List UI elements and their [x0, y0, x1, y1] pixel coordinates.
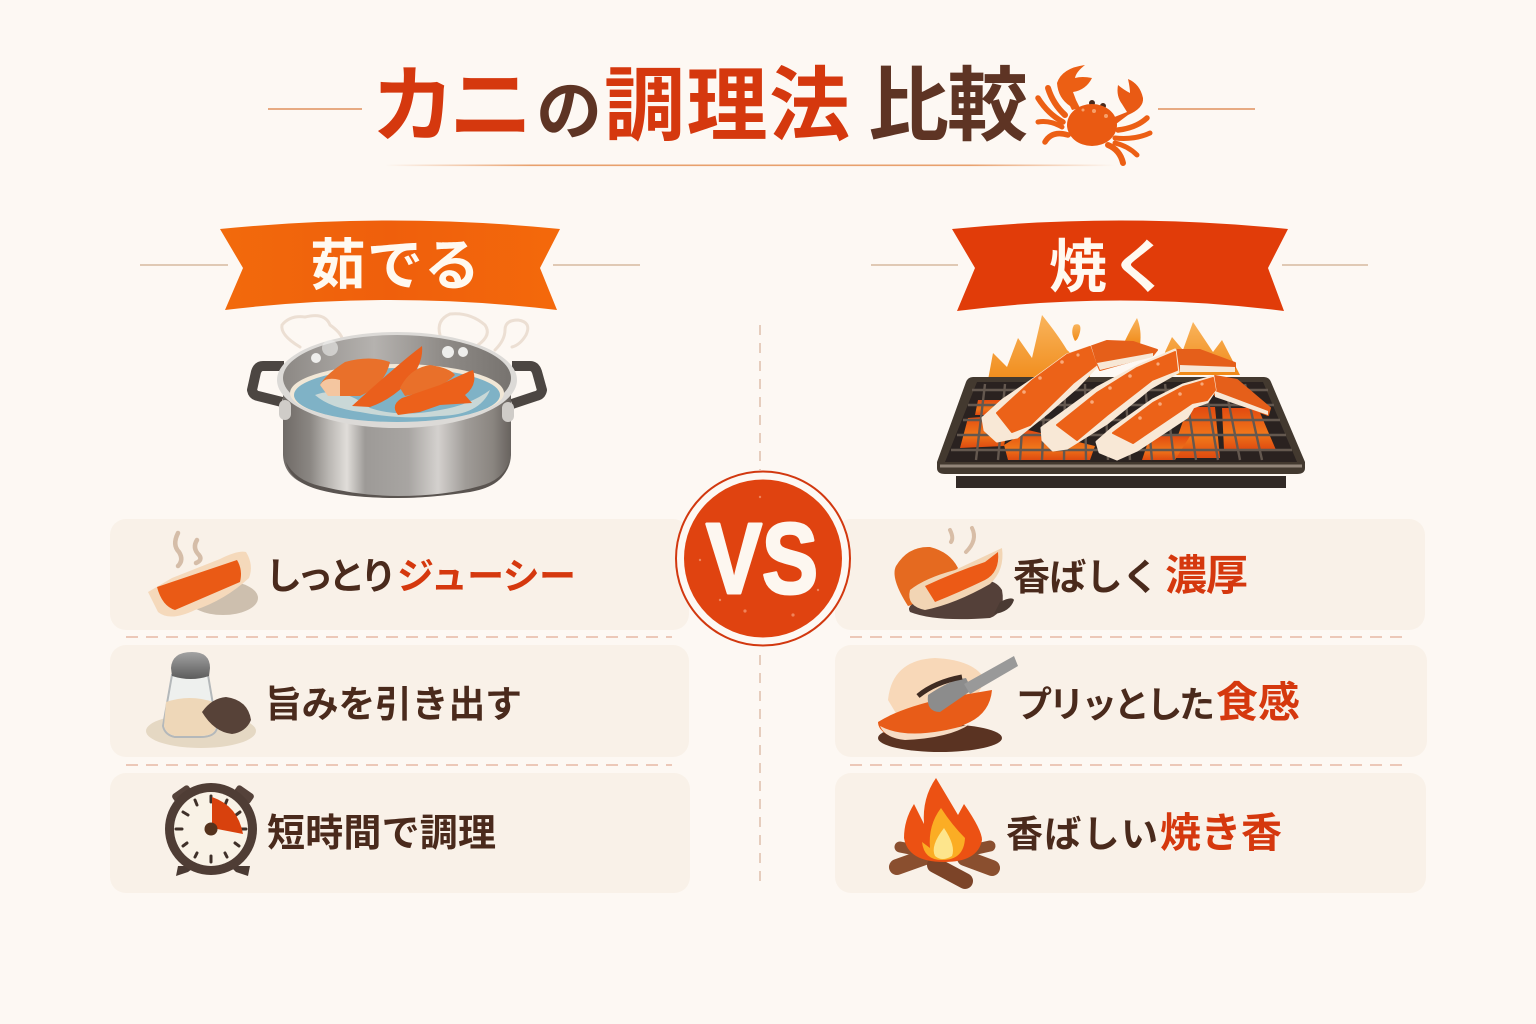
- text: 香ばしい焼き香: 香ばしい: [1006, 814, 1158, 855]
- pot body: [283, 392, 511, 498]
- title: [371, 59, 1028, 153]
- text: 香ばしく濃厚: 香ばしく: [1013, 557, 1159, 598]
- text: プリッとした食感: [1016, 679, 1300, 726]
- divider: [126, 636, 672, 638]
- text: 旨みを引き出す: 旨みを引き出す: [265, 684, 522, 725]
- embers: [960, 400, 1276, 460]
- banner: 茹でる: 茹でる: [310, 234, 480, 297]
- handles: [252, 366, 542, 404]
- icon: steaming crab meat: [148, 533, 258, 617]
- crab legs in water: [320, 358, 390, 396]
- crab leg 2: [1042, 350, 1235, 450]
- banner left rule right: [553, 264, 640, 266]
- banner right rule left: [871, 264, 958, 266]
- panel: right row 2: [835, 645, 1427, 757]
- banner: 茹でる: [220, 220, 560, 310]
- text: 香ばしい焼き香: 焼き香: [1160, 810, 1282, 856]
- illustration: boiling pot: [252, 314, 542, 498]
- panel: right row 3: [835, 773, 1426, 893]
- panel: left row 1: [110, 519, 689, 630]
- VS badge: [676, 472, 850, 646]
- grill frame: [937, 377, 1305, 474]
- illustration: grilled crab legs: [937, 315, 1305, 488]
- title: の: [536, 74, 602, 148]
- icon: crab: [1038, 65, 1150, 163]
- center dashed line bottom: [759, 655, 761, 882]
- panel: left row 3: [110, 773, 690, 893]
- title underline: [385, 164, 1115, 166]
- crab leg 3: [1097, 376, 1270, 459]
- icon: campfire: [897, 778, 992, 881]
- crab leg 1: [983, 341, 1157, 441]
- steam: [282, 314, 528, 350]
- center dashed line top: [759, 325, 761, 470]
- water: [290, 364, 504, 422]
- VS badge: VS: [706, 503, 818, 615]
- icon: salt shaker: [146, 652, 256, 748]
- icon: tongs and crab: [878, 656, 1018, 752]
- divider: [850, 764, 1410, 766]
- text: 香ばしい焼き香: [1006, 810, 1282, 856]
- text: 香ばしく濃厚: [1013, 552, 1248, 599]
- banner right rule right: [1282, 264, 1368, 266]
- title: 調理法: [604, 62, 850, 152]
- bubbles: [311, 340, 468, 363]
- title left rule: [268, 108, 362, 110]
- icon: timer clock: [165, 783, 257, 876]
- panel: left row 2: [110, 645, 689, 757]
- title: カニ: [371, 59, 533, 153]
- text: プリッとした食感: プリッとした: [1016, 684, 1215, 725]
- title right rule: [1158, 108, 1255, 110]
- banner: 焼く: [952, 220, 1288, 311]
- text: プリッとした食感: 食感: [1216, 679, 1300, 726]
- banner left rule: [140, 264, 228, 266]
- title: 比較: [868, 62, 1028, 152]
- grill rim and base: [940, 464, 1302, 468]
- grate lines: [951, 384, 1292, 460]
- flames: [988, 315, 1240, 385]
- text: しっとりジューシー: [265, 556, 576, 597]
- panel: right row 1: [835, 519, 1425, 630]
- text: 短時間で調理: 短時間で調理: [267, 813, 496, 855]
- text: しっとりジューシー: ジューシー: [397, 556, 576, 597]
- text: しっとりジューシー: しっとり: [265, 556, 397, 597]
- divider: [126, 764, 672, 766]
- divider: [850, 636, 1410, 638]
- banner: 焼く: 焼く: [1049, 235, 1169, 300]
- rivets: [279, 400, 291, 420]
- text: 香ばしく濃厚: 濃厚: [1165, 552, 1248, 599]
- icon: grilled crab claw: [894, 528, 1014, 619]
- rim: [277, 332, 517, 428]
